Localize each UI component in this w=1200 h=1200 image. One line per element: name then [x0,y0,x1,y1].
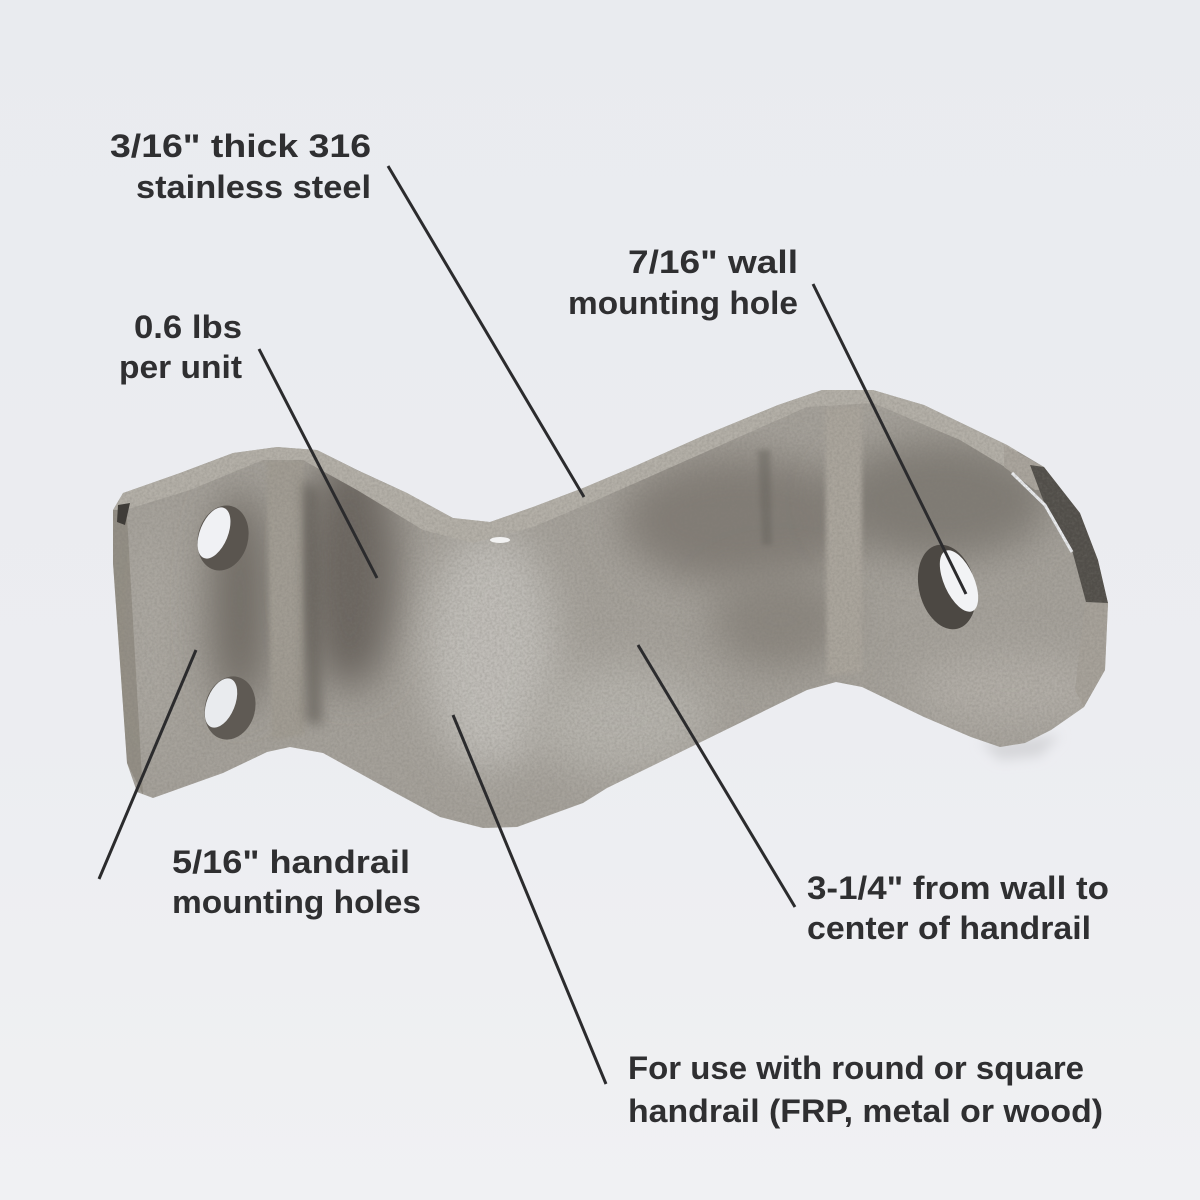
callout: thickness: 3/16" thick 316 [110,128,371,164]
callout: wall hole: mounting hole [568,285,798,321]
callout: thickness [110,128,584,497]
callout: handrail holes: mounting holes [172,884,421,920]
grain texture [100,380,1120,840]
bracket body [100,380,1120,840]
callout: weight [119,309,377,578]
callout: distance from wall [638,645,1109,946]
top rim [113,390,1018,543]
corner glint and dark spot [117,503,130,525]
callout: wall hole: 7/16" wall [628,244,798,280]
callout: thickness: stainless steel [136,169,371,205]
lower right face edge [1075,603,1108,707]
infographic [98,134,1108,1128]
right rim: upper [1004,446,1043,490]
right bend strip [825,405,862,676]
left flange edge [113,500,143,795]
hole: upper handrail [190,500,256,576]
left bend strip [268,494,304,682]
left bend dark band [303,480,322,725]
callout: weight: 0.6 lbs [134,309,242,345]
callout: compatible handrail: handrail (FRP, metal or wood) [628,1093,1103,1129]
callout: distance from wall: center of handrail [807,910,1091,946]
bracket shadow [980,735,1060,760]
right rim: light slit [1012,473,1072,552]
hole: wall mounting [909,539,986,635]
specular highlight [490,537,510,543]
callout: handrail holes [99,650,421,920]
right rim: dark edge [1030,465,1108,603]
hole: lower handrail [198,671,262,745]
callout: compatible handrail [453,715,1103,1129]
callout: compatible handrail: For use with round or square [628,1050,1084,1086]
photo: stainless steel bracket [100,380,1120,840]
callout: weight: per unit [119,349,242,385]
callout: distance from wall: 3-1/4" from wall to [807,870,1109,906]
scuff mark [758,450,772,545]
callout: handrail holes: 5/16" handrail [172,844,410,880]
callout: wall hole [568,244,966,594]
